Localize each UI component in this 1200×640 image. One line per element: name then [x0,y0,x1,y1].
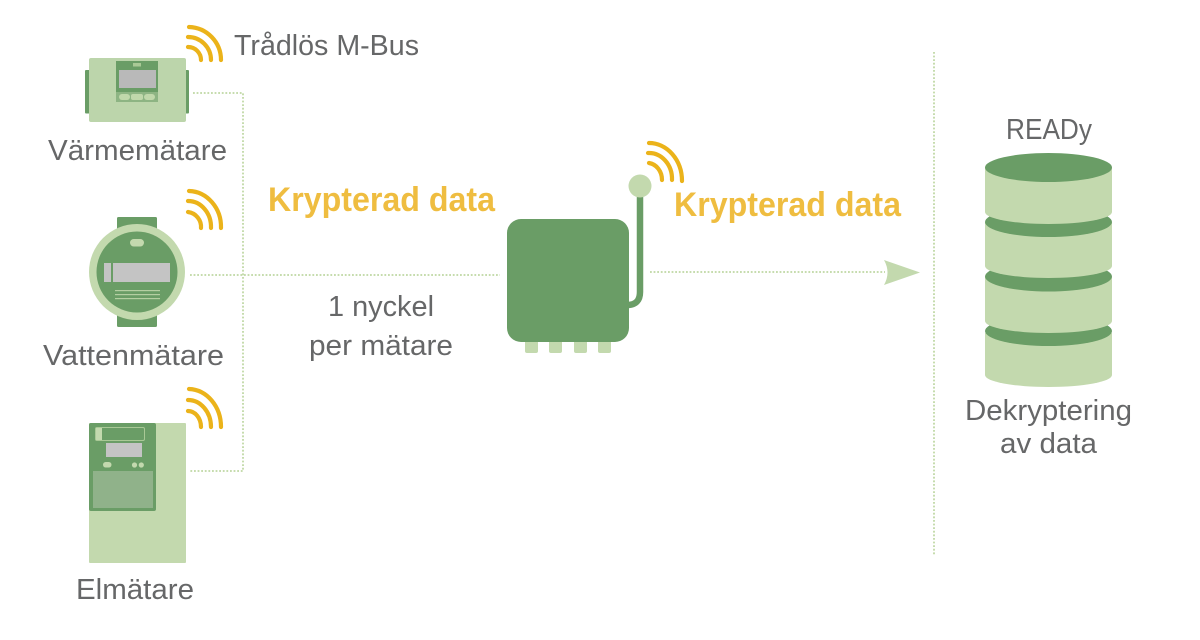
label: decryption of data [965,395,1132,460]
icon: database [985,153,1112,387]
label: water meter: Vattenmätare [43,340,224,372]
label: decryption of data: Dekryptering [965,395,1132,427]
label: heat meter: Värmemätare [48,135,227,167]
text: one key per meter: 1 nyckel [328,291,434,323]
icon: wireless signal gateway [648,143,682,181]
label: encrypted data left: Krypterad data [268,181,496,219]
icon: electricity meter [89,423,186,563]
label: decryption of data: av data [1000,428,1098,460]
label: READy: READy [1006,114,1092,146]
arrow [884,260,920,285]
icon: wireless signal heat meter [188,27,221,60]
icon: wireless signal water meter [188,191,221,228]
text: one key per meter: per mätare [309,330,453,362]
icon: wireless signal electricity meter [188,389,221,427]
label: wireless M-Bus: Trådlös M-Bus [234,30,419,62]
text: one key per meter [309,291,453,362]
icon: gateway [507,174,652,353]
icon: water meter [89,217,185,327]
label: electricity meter: Elmätare [76,574,194,606]
label: encrypted data right: Krypterad data [674,186,902,224]
icon: heat meter [85,58,189,122]
